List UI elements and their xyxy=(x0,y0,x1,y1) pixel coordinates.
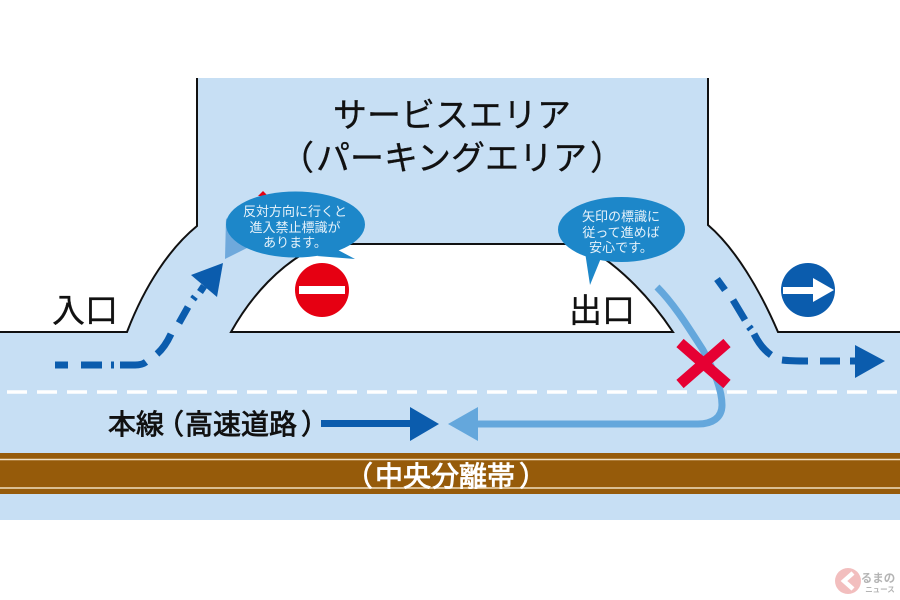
median label: ） xyxy=(519,461,547,492)
callout: exit advice: 矢印の標識に xyxy=(582,209,660,224)
callout: exit advice: 従って進めば xyxy=(582,225,660,240)
callout: exit advice: 安心です。 xyxy=(589,240,653,255)
median label: 中央分離帯 xyxy=(375,461,515,492)
callout: entrance warning xyxy=(225,191,365,259)
arrow: exit route xyxy=(717,279,885,378)
heading: service area: サービスエリア xyxy=(333,97,571,135)
label: main line: 本線 xyxy=(108,409,164,440)
label: exit: 出口 xyxy=(569,292,635,329)
watermark logo xyxy=(835,568,895,594)
road and service area surface xyxy=(0,78,900,520)
label: entrance: 入口 xyxy=(52,292,118,329)
label: main line: （ xyxy=(156,409,184,440)
heading: parking area: パーキングエリア xyxy=(316,140,587,178)
icon: no entry sign xyxy=(295,263,349,317)
arrow: wrong-way route xyxy=(448,287,722,441)
callout: entrance warning: あります。 xyxy=(263,235,327,250)
lane dashed line xyxy=(7,390,900,394)
callout: entrance warning: 進入禁止標識が xyxy=(249,220,341,235)
heading: parking area: （ xyxy=(280,140,314,178)
heading: parking area: ） xyxy=(590,140,624,178)
median strip xyxy=(0,453,900,494)
callout: entrance warning: 反対方向に行くと xyxy=(243,204,347,219)
icon: red cross xyxy=(680,343,727,384)
median label: （ xyxy=(345,461,373,492)
callout: exit advice xyxy=(558,197,685,285)
arrow: main line direction xyxy=(321,407,439,441)
label: main line: 高速道路 xyxy=(185,409,297,440)
island between entrance and exit xyxy=(231,244,673,332)
label: main line: ） xyxy=(301,409,329,440)
watermark logo: るまの xyxy=(861,572,895,585)
watermark logo: ニュース xyxy=(865,585,895,594)
icon: direction sign xyxy=(781,263,835,317)
arrow: entrance route xyxy=(55,263,223,365)
service area outline xyxy=(0,78,900,332)
